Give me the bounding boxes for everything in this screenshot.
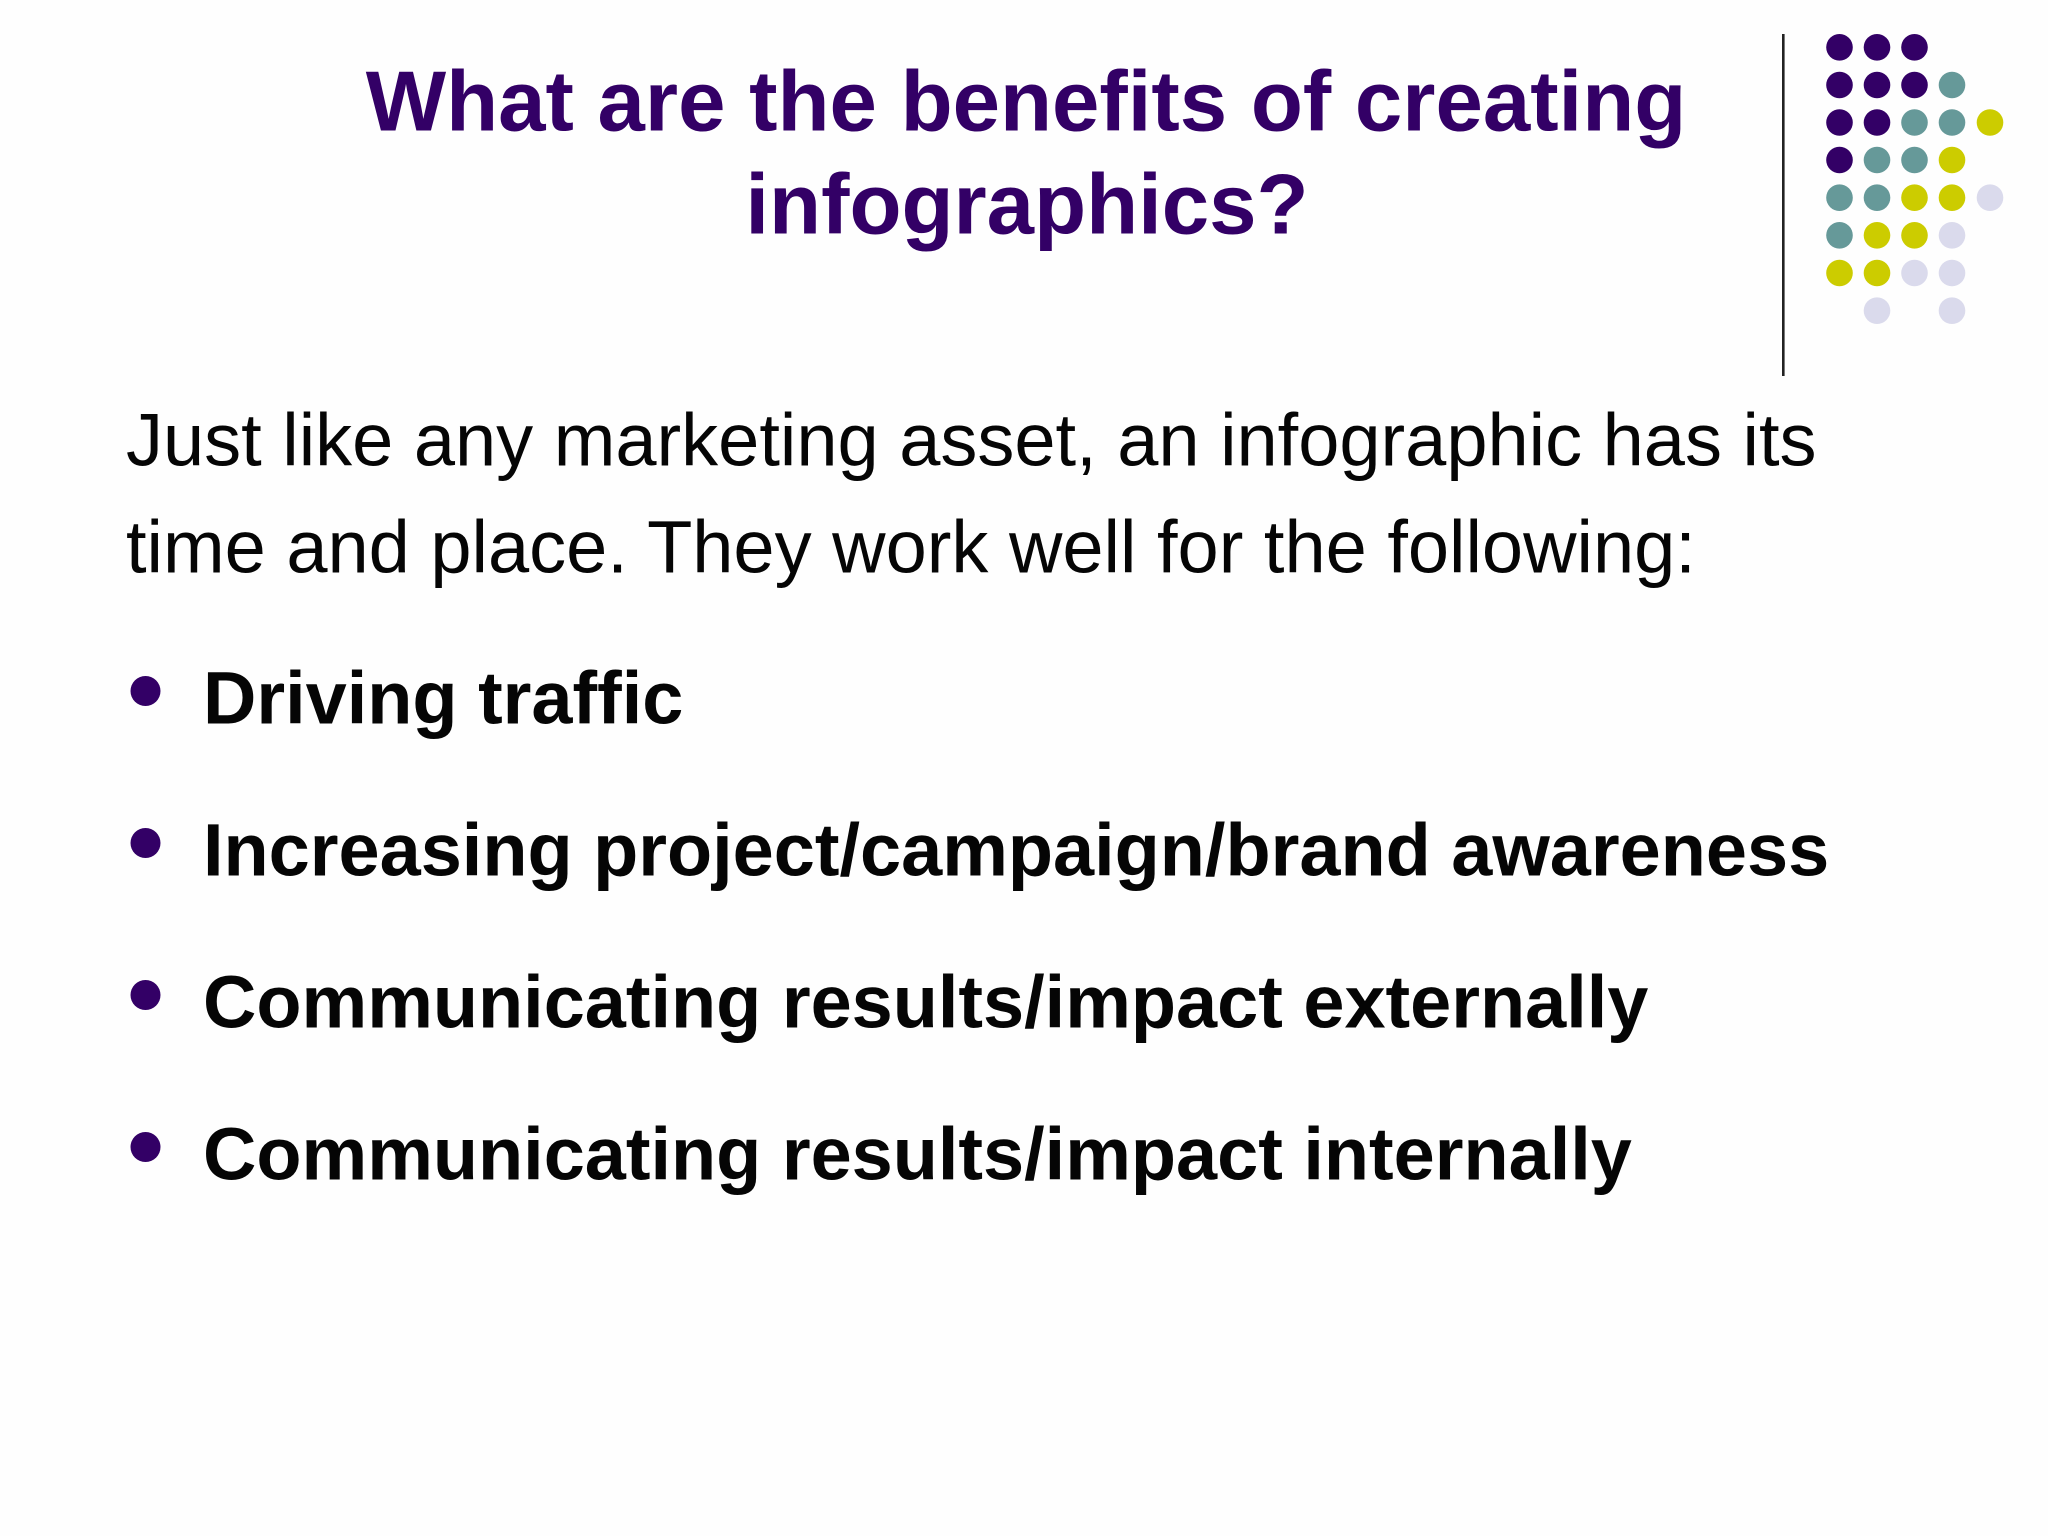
- bullet: external results: Communicating results/impact externally: [203, 960, 1648, 1044]
- bullet: driving traffic: Driving traffic: [203, 656, 683, 740]
- intro text: [126, 398, 1817, 588]
- title: What are the benefits of creating: [366, 54, 1686, 150]
- title: [366, 54, 1686, 252]
- title: infographics?: [745, 158, 1309, 252]
- intro text: time and place. They work well for the following:: [126, 506, 1696, 588]
- icon: decorative dot grid: [1826, 34, 2003, 324]
- bullet: awareness: Increasing project/campaign/brand awareness: [203, 808, 1829, 892]
- bullet: internal results: Communicating results/impact internally: [203, 1112, 1632, 1196]
- intro text: Just like any marketing asset, an infographic has its: [126, 398, 1817, 482]
- vertical rule: [1782, 34, 1785, 376]
- bullet list: [130, 656, 1829, 1196]
